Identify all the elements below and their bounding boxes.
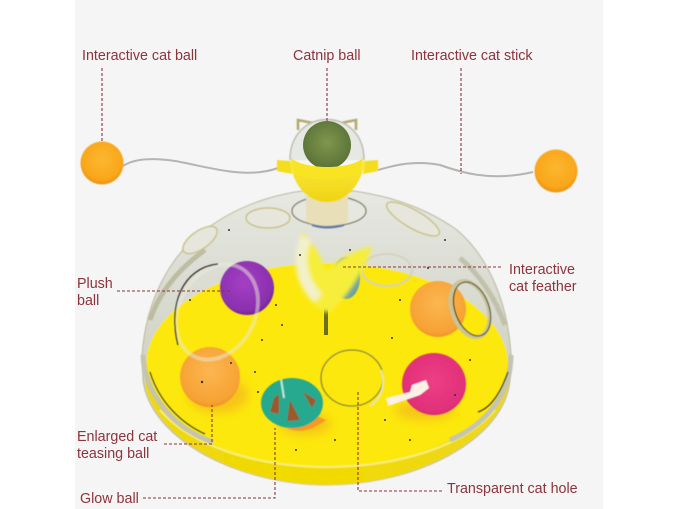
transparent cat holes: [160, 250, 498, 406]
specks: [189, 229, 471, 451]
interactive cat feather: [296, 232, 372, 312]
enlarged cat teasing ball: [180, 347, 240, 407]
toy: base band: [145, 365, 509, 485]
label: glow ball: Glow ball: [80, 491, 139, 507]
label: enlarged cat teasing ball: Enlarged cat: [77, 429, 157, 445]
catnip ball: [303, 121, 351, 169]
ball shadows: [188, 377, 455, 435]
wires: [123, 159, 533, 176]
toy: yellow floor: [146, 263, 508, 467]
label: plush ball: ball: [77, 293, 99, 309]
label: interactive cat feather: cat feather: [509, 279, 577, 295]
interactive cat ball left: [80, 142, 124, 184]
toy: dome and base: [142, 189, 511, 485]
interactive orange ball: [410, 281, 466, 337]
central pillar: [292, 196, 366, 228]
feather stem: [324, 305, 328, 335]
plush ball: [220, 261, 274, 315]
holder cup: [290, 160, 365, 202]
label: interactive cat feather: Interactive: [509, 262, 575, 278]
label: plush ball: Plush: [77, 276, 113, 292]
dome rim streaks: [143, 250, 511, 442]
label: enlarged cat teasing ball: teasing ball: [77, 446, 149, 462]
background panel: [75, 0, 603, 509]
label: interactive cat stick: Interactive cat stick: [411, 48, 533, 64]
dome holes: [178, 196, 443, 286]
label: catnip ball: Catnip ball: [293, 48, 361, 64]
label: interactive cat ball: Interactive cat ball: [82, 48, 197, 64]
pink ball: [386, 353, 466, 415]
holder glass: [290, 120, 364, 160]
leader lines: [102, 68, 502, 498]
catnip holder: [277, 120, 378, 202]
holder front rim: [291, 158, 363, 180]
label: transparent cat hole: Transparent cat hole: [447, 481, 578, 497]
blue ball behind feather: [332, 257, 360, 299]
holder ears: [298, 120, 356, 130]
glow ball: [261, 378, 326, 431]
interactive cat ball right: [534, 150, 578, 192]
holder arms: [277, 160, 378, 174]
